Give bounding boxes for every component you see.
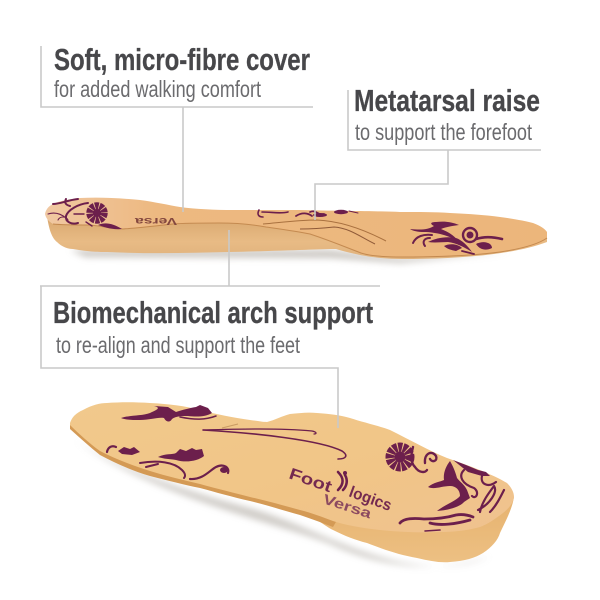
subheading: soft cover: for added walking comfort bbox=[54, 76, 261, 102]
Versa printed text: Versa bbox=[134, 215, 177, 226]
Footlogics Versa logo: logics bbox=[347, 484, 394, 515]
toe floral print bbox=[121, 405, 216, 422]
Footlogics Versa logo: Versa bbox=[321, 491, 374, 521]
insole front edge bbox=[70, 423, 340, 527]
heading: soft cover: Soft, micro-fibre cover bbox=[54, 42, 310, 77]
callout lines bbox=[40, 46, 541, 428]
callout: metatarsal raise bbox=[354, 83, 540, 145]
insole side wall bbox=[47, 216, 547, 259]
arch contour lines bbox=[203, 424, 346, 459]
subheading: metatarsal raise: to support the forefoot bbox=[355, 119, 532, 145]
heel floral print bbox=[48, 199, 122, 229]
insole top face bbox=[45, 198, 547, 257]
panel: bottom insole angled view bbox=[70, 402, 514, 566]
heading: arch support: Biomechanical arch support bbox=[53, 295, 373, 330]
insole face edge line bbox=[53, 223, 547, 257]
Footlogics Versa logo bbox=[287, 466, 394, 521]
panel: top insole side view bbox=[45, 198, 547, 263]
subheading: arch support: to re-align and support the feet bbox=[56, 332, 300, 358]
Footlogics Versa logo: Foot bbox=[287, 466, 335, 496]
callout: arch support bbox=[53, 295, 373, 358]
mid-foot floral print bbox=[258, 210, 358, 217]
heel floral print bbox=[390, 447, 504, 531]
shadow under bottom insole bbox=[76, 440, 490, 566]
callout: soft cover bbox=[54, 42, 310, 102]
metatarsal contour lines bbox=[263, 220, 386, 244]
heading: metatarsal raise: Metatarsal raise bbox=[354, 83, 540, 118]
mid floral print bbox=[107, 446, 228, 479]
shadow under top insole bbox=[70, 250, 510, 263]
insole top face bbox=[70, 402, 514, 532]
insole side wall bbox=[300, 497, 514, 562]
forefoot floral print bbox=[410, 222, 502, 254]
